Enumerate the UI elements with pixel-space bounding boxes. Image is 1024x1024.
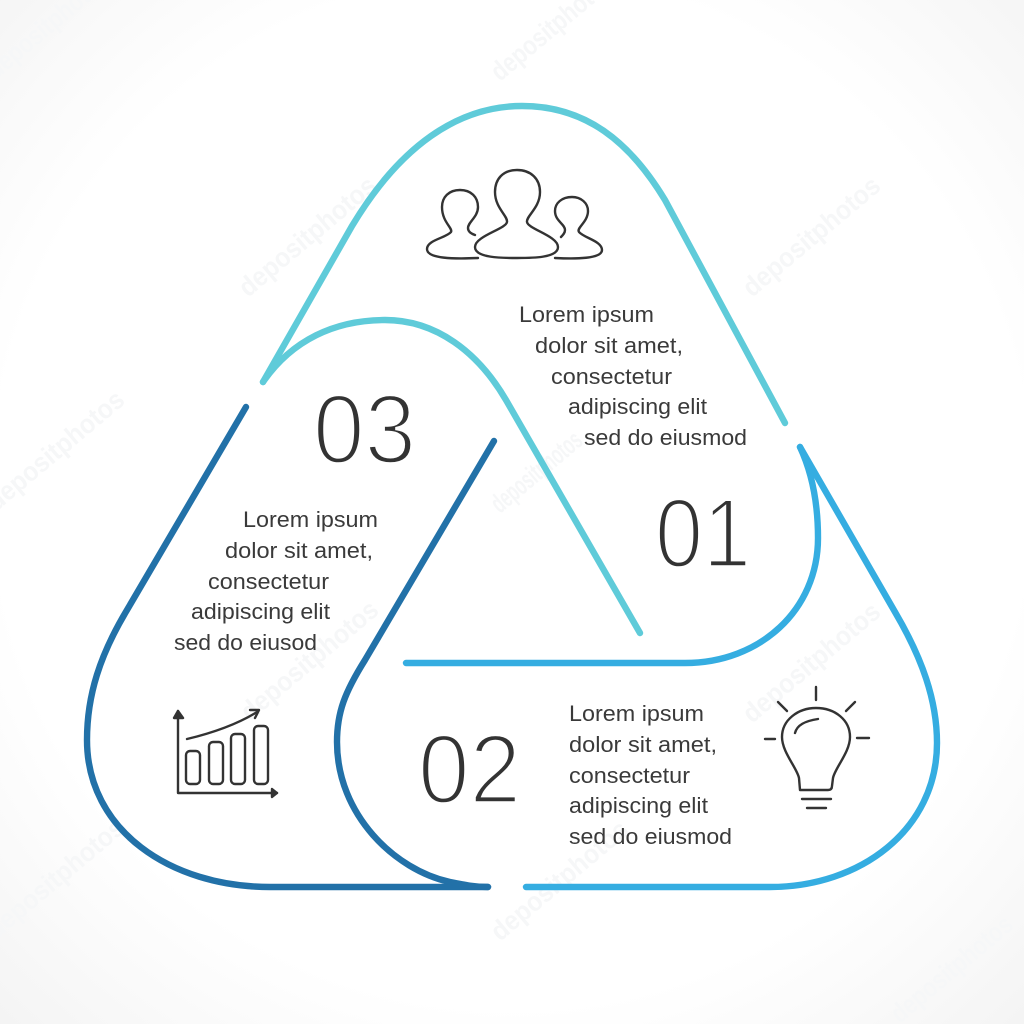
text block 02: sed do eiusmod <box>569 824 732 849</box>
watermarks: depositphotos <box>233 170 382 303</box>
text block 03: consectetur <box>208 569 329 594</box>
text block 03: sed do eiusod <box>174 630 317 655</box>
number 03: 03 <box>313 374 416 484</box>
text block 01: Lorem ipsum <box>519 302 654 327</box>
text block 01: dolor sit amet, <box>535 333 683 358</box>
text block 01: sed do eiusmod <box>584 425 747 450</box>
text block 03: Lorem ipsum <box>243 507 378 532</box>
text block 02: consectetur <box>569 763 690 788</box>
segment 02: sky blue outline <box>406 447 937 887</box>
text block 01: consectetur <box>551 364 672 389</box>
icon: light bulb <box>765 687 869 808</box>
text block 01: adipiscing elit <box>568 394 707 419</box>
watermarks: depositphotos <box>737 596 886 729</box>
segment 01: teal outline <box>263 106 785 633</box>
watermarks: depositphotos <box>737 170 886 303</box>
text block 03: dolor sit amet, <box>225 538 373 563</box>
icon: people <box>427 170 602 258</box>
text block 02: dolor sit amet, <box>569 732 717 757</box>
segment 03: dark blue outline <box>87 407 494 887</box>
number 02: 02 <box>418 714 521 824</box>
watermarks: depositphotos <box>235 594 384 727</box>
text block 02: Lorem ipsum <box>569 701 704 726</box>
text block 01 <box>519 302 747 450</box>
watermarks: depositphotos <box>485 814 634 947</box>
icon: bar chart <box>174 710 277 797</box>
number 01: 01 <box>655 478 751 588</box>
text block 03: adipiscing elit <box>191 599 330 624</box>
watermarks: depositphotos <box>485 425 588 519</box>
text block 02 <box>569 701 732 849</box>
text block 03 <box>174 507 378 655</box>
text block 02: adipiscing elit <box>569 793 708 818</box>
